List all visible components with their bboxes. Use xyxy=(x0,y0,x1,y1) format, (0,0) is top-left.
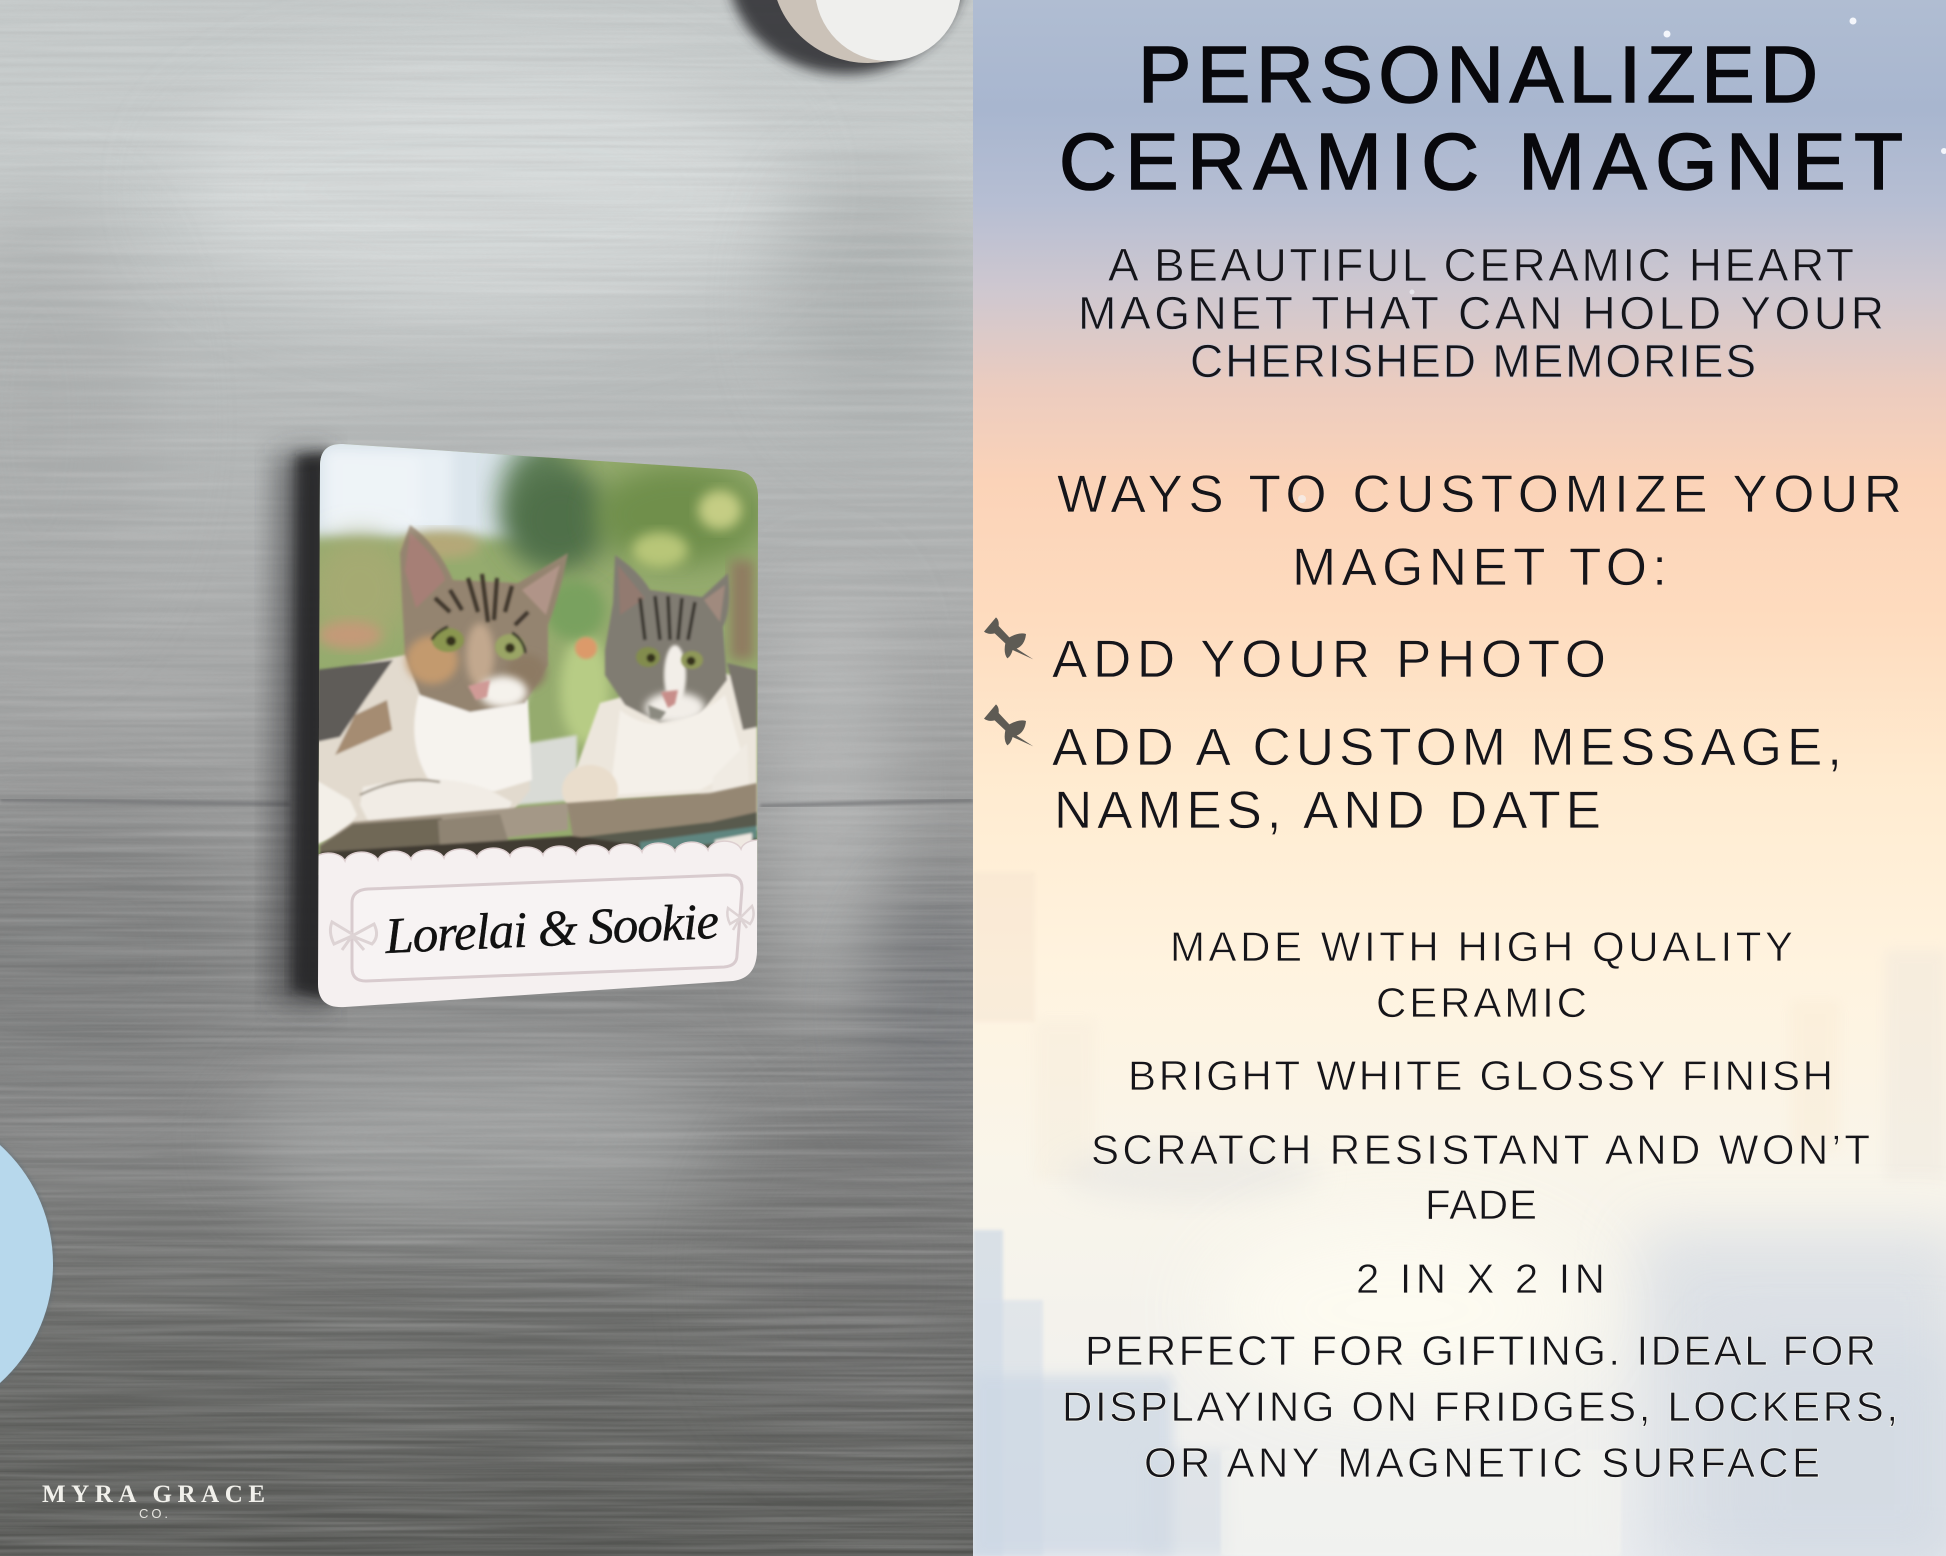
brand logo xyxy=(42,1481,265,1521)
subtitle: CHERISHED MEMORIES xyxy=(1190,335,1756,387)
feature: ceramic: MADE WITH HIGH QUALITY xyxy=(1170,923,1793,970)
feature: durability xyxy=(1091,1126,1870,1228)
icon: right bow xyxy=(727,906,754,930)
brand logo: CO. xyxy=(139,1506,168,1521)
customize option: message: NAMES, AND DATE xyxy=(1054,781,1601,840)
subtitle: MAGNET THAT CAN HOLD YOUR xyxy=(1078,287,1884,339)
customize option: message: ADD A CUSTOM MESSAGE, xyxy=(1052,718,1842,777)
glossy highlight xyxy=(407,525,417,534)
title xyxy=(1059,30,1903,206)
customize option: photo: ADD YOUR PHOTO xyxy=(1052,630,1606,689)
right cat xyxy=(562,555,757,845)
customize heading: MAGNET TO: xyxy=(1292,538,1667,597)
scalloped name band xyxy=(312,840,774,1012)
feature: uses: PERFECT FOR GIFTING. IDEAL FOR xyxy=(1085,1327,1876,1374)
icon: left bow xyxy=(330,922,377,950)
sparkles xyxy=(1298,18,1946,503)
icon: push pin 2 xyxy=(984,704,1033,746)
feature: durability: FADE xyxy=(1425,1181,1537,1228)
name text: Lorelai & Sookie xyxy=(383,894,720,965)
brand logo: MYRA GRACE xyxy=(42,1481,265,1508)
feature: uses: OR ANY MAGNETIC SURFACE xyxy=(1144,1439,1820,1486)
panel: fridge photo xyxy=(0,0,1010,1556)
feature: durability: SCRATCH RESISTANT AND WON’T xyxy=(1091,1126,1870,1173)
left cat xyxy=(316,525,568,845)
name plate xyxy=(330,875,754,981)
customize heading: WAYS TO CUSTOMIZE YOUR xyxy=(1057,465,1902,524)
door seam xyxy=(0,800,973,806)
feature: uses: DISPLAYING ON FRIDGES, LOCKERS, xyxy=(1062,1383,1898,1430)
icon: white round magnet top xyxy=(728,0,964,74)
feature: uses xyxy=(1062,1327,1898,1486)
feature: ceramic: CERAMIC xyxy=(1376,979,1587,1026)
feature: size: 2 IN X 2 IN xyxy=(1356,1255,1605,1302)
feature: finish: BRIGHT WHITE GLOSSY FINISH xyxy=(1128,1052,1833,1099)
faded city background xyxy=(973,872,1946,1556)
title: CERAMIC MAGNET xyxy=(1059,117,1903,206)
feature: ceramic xyxy=(1170,923,1793,1026)
panel: product details xyxy=(973,0,1946,1556)
magnet shadow xyxy=(272,450,330,1010)
subtitle xyxy=(1078,239,1884,387)
customize option: message xyxy=(1052,718,1842,840)
stone ledge xyxy=(320,783,757,870)
subtitle: A BEAUTIFUL CERAMIC HEART xyxy=(1108,239,1854,291)
magnet photo background xyxy=(300,425,765,875)
icon: push pin 1 xyxy=(984,617,1033,659)
title: PERSONALIZED xyxy=(1138,30,1818,119)
photo magnet xyxy=(318,444,758,1008)
icon: blue round magnet left xyxy=(0,1142,54,1383)
customize heading xyxy=(1057,465,1902,597)
